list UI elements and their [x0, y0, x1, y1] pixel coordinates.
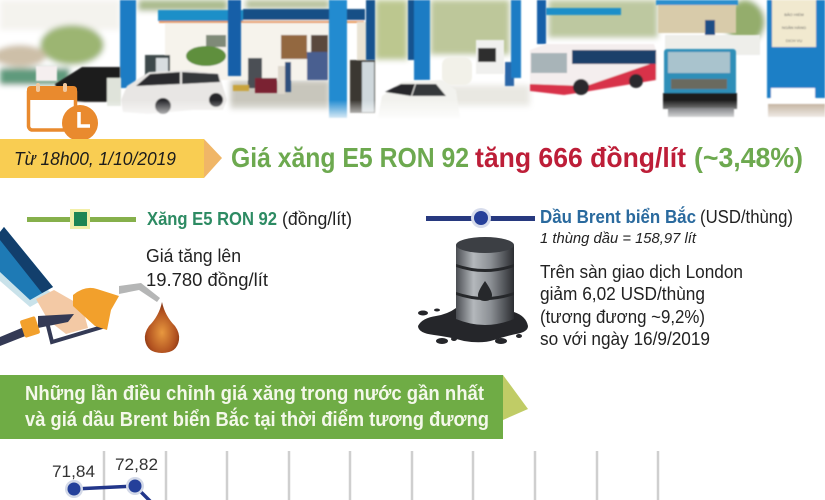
bus — [530, 44, 657, 95]
line chart: Brent price — [52, 451, 658, 500]
icon: fuel drop — [145, 302, 179, 353]
price board: NGÂN HÀNG — [782, 25, 806, 30]
price board — [767, 0, 825, 117]
text: Brent price change: Trên sàn giao dịch London — [540, 262, 743, 282]
price board: BẢO HIỂM — [784, 12, 804, 17]
section heading banner: và giá dầu Brent biển Bắc tại thời điểm tương đương — [25, 407, 489, 431]
legend: Brent crude — [426, 206, 793, 228]
icon: hand with fuel nozzle — [0, 227, 160, 346]
line chart: Brent price: 71,84 — [52, 462, 95, 481]
legend: E5 RON 92 petrol — [27, 209, 352, 229]
text: Brent price change: giảm 6,02 USD/thùng — [540, 284, 705, 304]
text: barrel conversion note: 1 thùng dầu = 158,97 lít — [540, 230, 697, 247]
date banner — [0, 139, 222, 178]
icon: calendar and clock — [27, 83, 98, 141]
title: price headline — [231, 142, 803, 173]
white car — [378, 80, 460, 118]
title: price headline: Giá xăng E5 RON 92 — [231, 142, 469, 173]
title: price headline: tăng 666 đồng/lít — [475, 142, 686, 173]
white SUV — [121, 70, 227, 114]
text: petrol price: Giá tăng lên — [146, 246, 241, 266]
title: price headline: (~3,48%) — [694, 142, 803, 173]
station shop — [145, 9, 375, 113]
legend: Brent crude: Dầu Brent biển Bắc — [540, 206, 696, 227]
canopies far right — [442, 0, 760, 86]
photo: petrol station header — [0, 0, 825, 125]
text: petrol price — [146, 246, 268, 290]
blue canopy pillars — [120, 0, 546, 118]
text: petrol price: 19.780 đồng/lít — [146, 270, 268, 290]
legend: E5 RON 92 petrol: (đồng/lít) — [282, 209, 352, 229]
text: Brent price change: (tương đương ~9,2%) — [540, 307, 705, 327]
section heading banner — [0, 375, 528, 439]
icon: oil barrel with spill — [418, 237, 528, 344]
line chart: Brent price: 72,82 — [115, 455, 158, 474]
price board: DỊCH VỤ — [786, 38, 802, 43]
blue truck — [663, 49, 737, 117]
section heading banner: Những lần điều chỉnh giá xăng trong nước gần nhất — [25, 383, 484, 405]
text: Brent price change: so với ngày 16/9/2019 — [540, 329, 710, 349]
text: Brent price change — [540, 262, 743, 349]
legend: Brent crude: (USD/thùng) — [700, 207, 793, 227]
date banner: Từ 18h00, 1/10/2019 — [14, 149, 176, 169]
legend: E5 RON 92 petrol: Xăng E5 RON 92 — [147, 209, 277, 229]
black car — [36, 66, 121, 106]
